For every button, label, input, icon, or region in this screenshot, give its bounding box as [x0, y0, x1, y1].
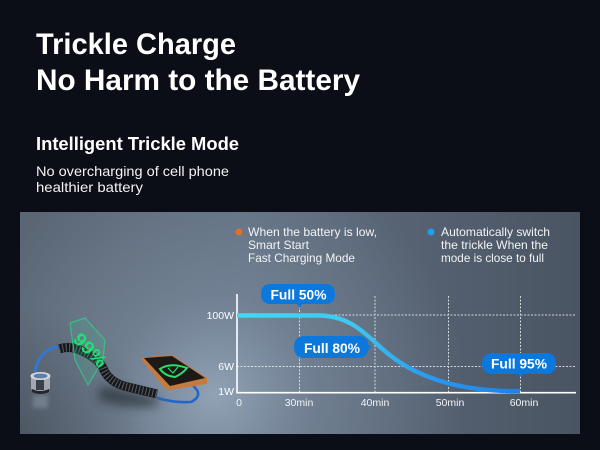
icon: smartphone	[141, 355, 207, 390]
y-axis labels: 6W	[218, 361, 234, 373]
cable shadow	[98, 386, 158, 407]
legend: trickle mode: the trickle When the	[441, 238, 548, 252]
legend: trickle mode: Automatically switch	[441, 225, 550, 239]
callout: full 50%	[261, 284, 335, 308]
legend: fast charging: When the battery is low,	[248, 225, 377, 239]
subheading: Intelligent Trickle Mode	[36, 134, 239, 154]
axes	[237, 294, 576, 393]
callout: full 80%: Full 80%	[304, 340, 361, 356]
title	[36, 28, 360, 97]
icon: shield with 99%: 99%	[69, 329, 111, 372]
title: No Harm to the Battery	[36, 64, 360, 97]
y-axis labels	[207, 310, 234, 398]
blue cable near plug	[35, 346, 60, 372]
y-axis labels: 100W	[207, 310, 234, 322]
icon: shield with 99%	[69, 318, 111, 385]
callout: full 95%: Full 95%	[491, 356, 548, 372]
blue cable near phone	[157, 383, 198, 402]
charging curve	[237, 316, 520, 391]
x-axis labels: 40min	[361, 397, 389, 409]
legend: trickle mode: mode is close to full	[441, 251, 544, 265]
callout: full 95%	[482, 353, 556, 377]
x-axis labels	[236, 397, 538, 409]
description text: healthier battery	[36, 179, 143, 195]
title: Trickle Charge	[36, 28, 236, 61]
callout: full 50%: Full 50%	[270, 286, 327, 302]
callout: full 80%	[294, 336, 371, 358]
legend: fast charging	[236, 225, 377, 265]
x-axis labels: 30min	[285, 397, 313, 409]
panel: charging chart	[20, 212, 580, 434]
x-axis labels: 60min	[510, 397, 538, 409]
power chart	[207, 284, 576, 409]
legend: fast charging: Smart Start	[248, 238, 310, 252]
y-axis labels: 1W	[218, 386, 234, 398]
legend: trickle mode	[428, 225, 550, 265]
illustration: cable charging a phone	[30, 318, 207, 408]
x-axis labels: 0	[236, 397, 242, 409]
coiled cable	[59, 348, 157, 394]
description text	[36, 163, 229, 195]
legend: fast charging: Fast Charging Mode	[248, 251, 355, 265]
icon: car charger plug	[30, 372, 50, 408]
x-axis labels: 50min	[436, 397, 464, 409]
description text: No overcharging of cell phone	[36, 163, 229, 179]
